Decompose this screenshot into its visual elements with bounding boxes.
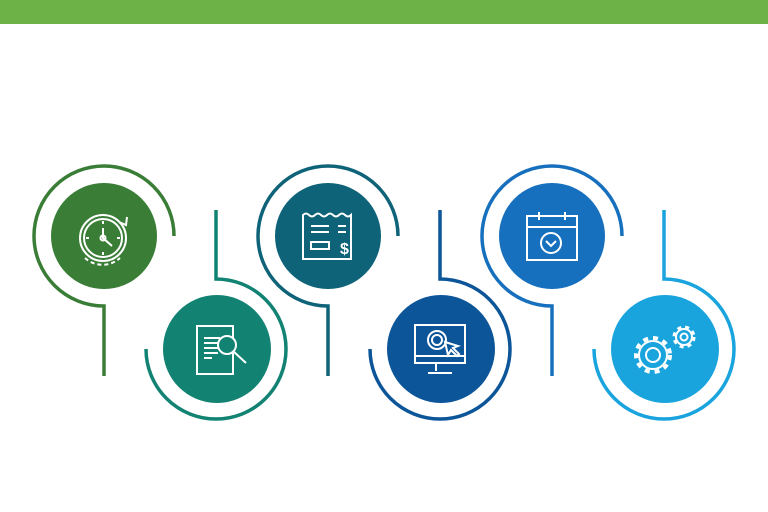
icon: gears [636, 327, 694, 372]
icon: calendar with clock [527, 212, 577, 260]
top green banner [0, 0, 768, 24]
step 6: gears [594, 210, 734, 419]
icon: monitor with dollar target [415, 325, 465, 373]
step 3: invoice [258, 166, 398, 376]
step 1: clock [34, 166, 174, 376]
icon: invoice with dollar [303, 214, 351, 259]
step 5: calendar [482, 166, 622, 376]
step 4: computer click [370, 210, 510, 419]
icon: clock with arrow [80, 215, 127, 265]
step 2: document search [146, 210, 286, 419]
step 3: invoice: $ [340, 241, 349, 258]
icon: document with magnifier [197, 326, 246, 374]
